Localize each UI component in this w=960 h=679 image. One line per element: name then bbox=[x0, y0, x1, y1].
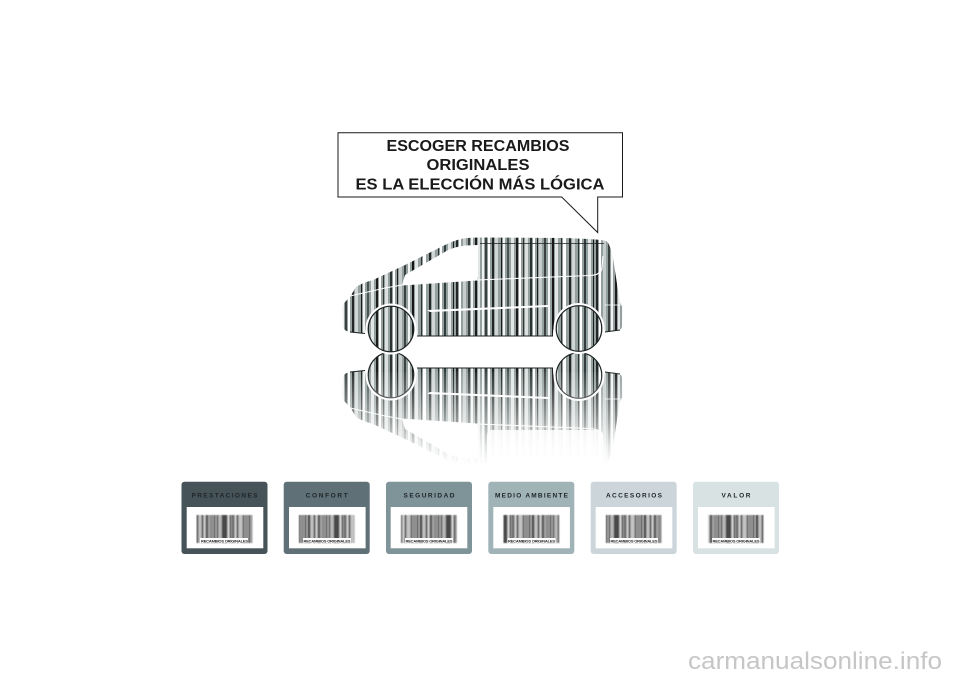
card: seguridad: SEGURIDAD bbox=[404, 492, 455, 500]
van made of barcode stripes bbox=[342, 238, 623, 354]
speech bubble callout bbox=[338, 133, 622, 232]
card: accesorios: RECAMBIOS ORIGINALES bbox=[610, 538, 658, 544]
card: medio ambiente: MEDIO AMBIENTE bbox=[495, 492, 569, 500]
card: valor bbox=[693, 482, 779, 554]
card: medio ambiente: RECAMBIOS ORIGINALES bbox=[508, 538, 555, 544]
callout text: ESCOGER RECAMBIOS bbox=[386, 138, 570, 155]
card: medio ambiente bbox=[488, 482, 574, 554]
card: accesorios bbox=[591, 482, 677, 554]
card: valor: RECAMBIOS ORIGINALES bbox=[712, 538, 760, 544]
callout text: ORIGINALES bbox=[426, 157, 530, 174]
card: prestaciones: PRESTACIONES bbox=[192, 492, 258, 500]
watermark: carmanualsonline.info bbox=[688, 648, 942, 675]
card: prestaciones bbox=[182, 482, 268, 554]
card: seguridad bbox=[386, 482, 472, 554]
card: valor: VALOR bbox=[722, 492, 751, 500]
card: confort: RECAMBIOS ORIGINALES bbox=[304, 538, 351, 544]
callout text bbox=[356, 138, 605, 194]
card: confort: CONFORT bbox=[306, 492, 348, 500]
van reflection bbox=[334, 350, 640, 470]
card: seguridad: RECAMBIOS ORIGINALES bbox=[406, 538, 453, 544]
card: prestaciones: RECAMBIOS ORIGINALES bbox=[201, 538, 248, 544]
card: accesorios: ACCESORIOS bbox=[606, 492, 663, 500]
callout text: ES LA ELECCIÓN MÁS LÓGICA bbox=[356, 174, 605, 194]
card: confort bbox=[284, 482, 370, 554]
